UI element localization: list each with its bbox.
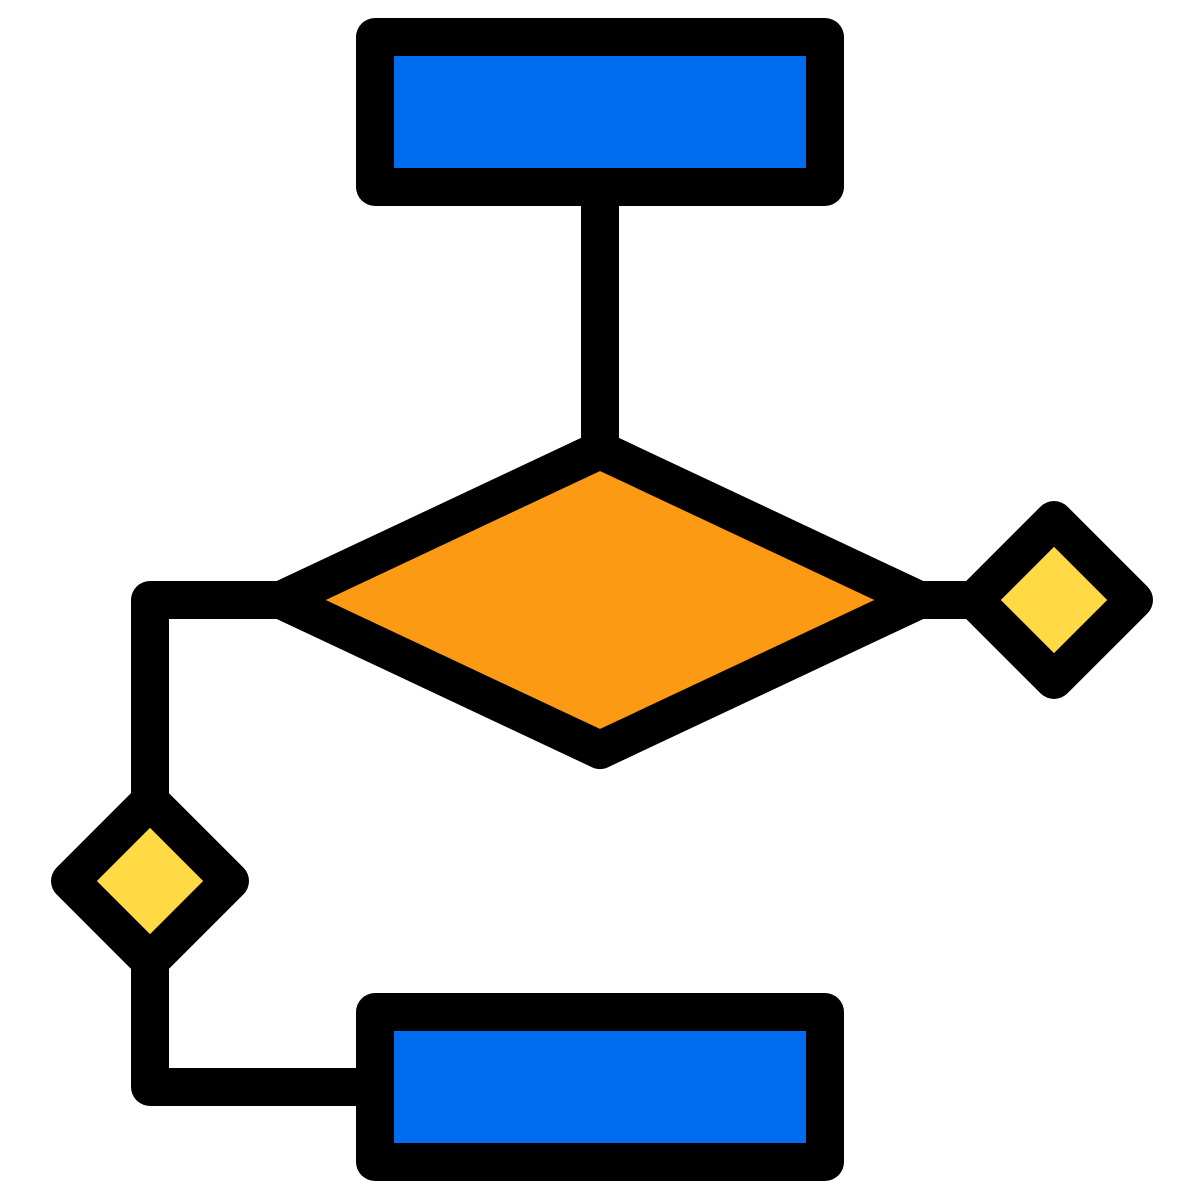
top rectangle bbox=[375, 37, 825, 187]
connector lines bbox=[150, 187, 974, 1087]
right small diamond bbox=[974, 520, 1134, 680]
central decision diamond bbox=[281, 450, 919, 750]
left small diamond bbox=[70, 801, 230, 961]
bottom rectangle bbox=[375, 1012, 825, 1162]
